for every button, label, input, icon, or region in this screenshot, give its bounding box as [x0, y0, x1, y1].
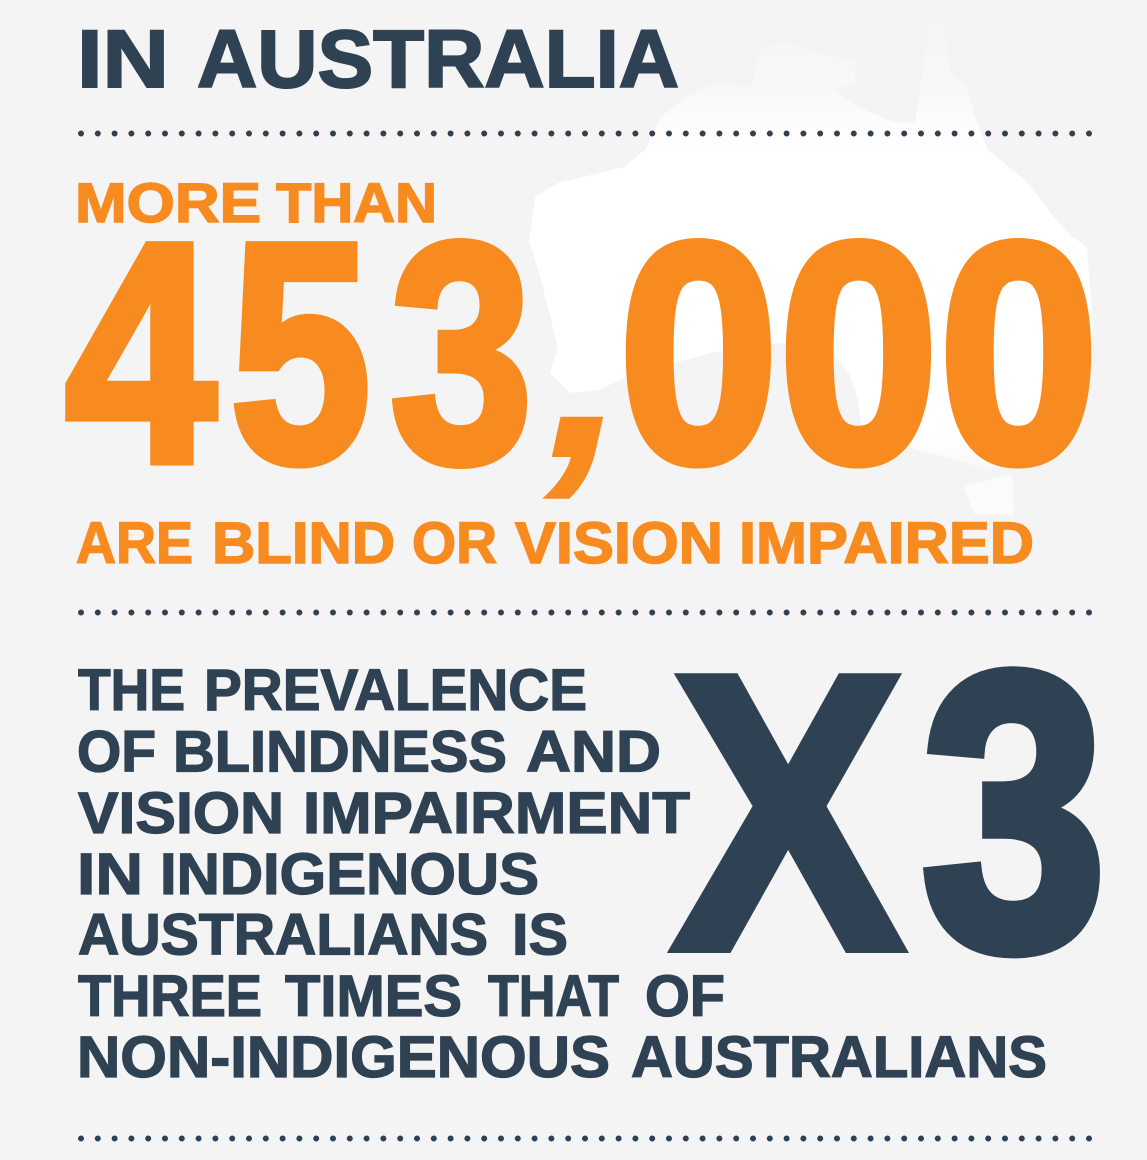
big number: 453,000: 000 — [618, 178, 1099, 528]
label: are blind or vision impaired: OR — [412, 511, 497, 576]
big number: 453,000 — [65, 178, 1099, 528]
big number: 453,000: , — [540, 213, 629, 514]
text block: prevalence in Indigenous Australians: INDIGENOUS — [160, 842, 539, 907]
text block: prevalence in Indigenous Australians: IMPAIRMENT — [303, 781, 690, 846]
text block: prevalence in Indigenous Australians — [77, 658, 1047, 1090]
text block: prevalence in Indigenous Australians: THAT — [488, 964, 619, 1029]
label: more than — [75, 171, 437, 234]
text block: prevalence in Indigenous Australians: IN — [77, 842, 143, 907]
dotted divider top — [81, 130, 1090, 136]
label: are blind or vision impaired: BLIND — [212, 511, 395, 576]
big multiplier: X3: X — [672, 594, 906, 1032]
text block: prevalence in Indigenous Australians: NON-INDIGENOUS — [77, 1025, 610, 1090]
text block: prevalence in Indigenous Australians: AND — [526, 720, 661, 784]
label: more than: THAN — [276, 171, 437, 234]
text block: prevalence in Indigenous Australians: OF — [645, 964, 725, 1029]
text block: prevalence in Indigenous Australians: VISION — [78, 781, 284, 846]
label: are blind or vision impaired — [76, 511, 1034, 576]
text block: prevalence in Indigenous Australians: BLINDNESS — [173, 720, 507, 784]
heading: in Australia: IN — [77, 14, 169, 105]
label: are blind or vision impaired: ARE — [76, 511, 193, 576]
text block: prevalence in Indigenous Australians: IS — [512, 902, 568, 968]
big multiplier: X3 — [672, 593, 1106, 1032]
text block: prevalence in Indigenous Australians: AUSTRALIANS — [78, 902, 488, 968]
text block: prevalence in Indigenous Australians: AUSTRALIANS — [631, 1025, 1047, 1090]
text block: prevalence in Indigenous Australians: TIMES — [285, 964, 462, 1029]
big multiplier: X3: 3 — [922, 593, 1106, 1031]
text block: prevalence in Indigenous Australians: THREE — [78, 964, 262, 1029]
dotted divider bottom — [81, 1136, 1090, 1142]
statistic: more than 453,000 blind or vision impaired — [65, 171, 1099, 576]
text block: prevalence in Indigenous Australians: OF — [77, 720, 156, 784]
big number: 453,000: 5 — [230, 179, 371, 528]
label: are blind or vision impaired: IMPAIRED — [739, 511, 1034, 576]
label: are blind or vision impaired: VISION — [515, 511, 723, 576]
dotted divider middle — [81, 610, 1090, 616]
text block: prevalence in Indigenous Australians: THE — [78, 658, 185, 723]
map of Australia silhouette — [529, 17, 1093, 515]
heading: in Australia: AUSTRALIA — [197, 14, 679, 105]
text block: prevalence in Indigenous Australians: PREVALENCE — [204, 658, 587, 723]
label: more than: MORE — [75, 171, 261, 234]
big number: 453,000: 4 — [65, 179, 218, 528]
big number: 453,000: 3 — [390, 178, 533, 528]
